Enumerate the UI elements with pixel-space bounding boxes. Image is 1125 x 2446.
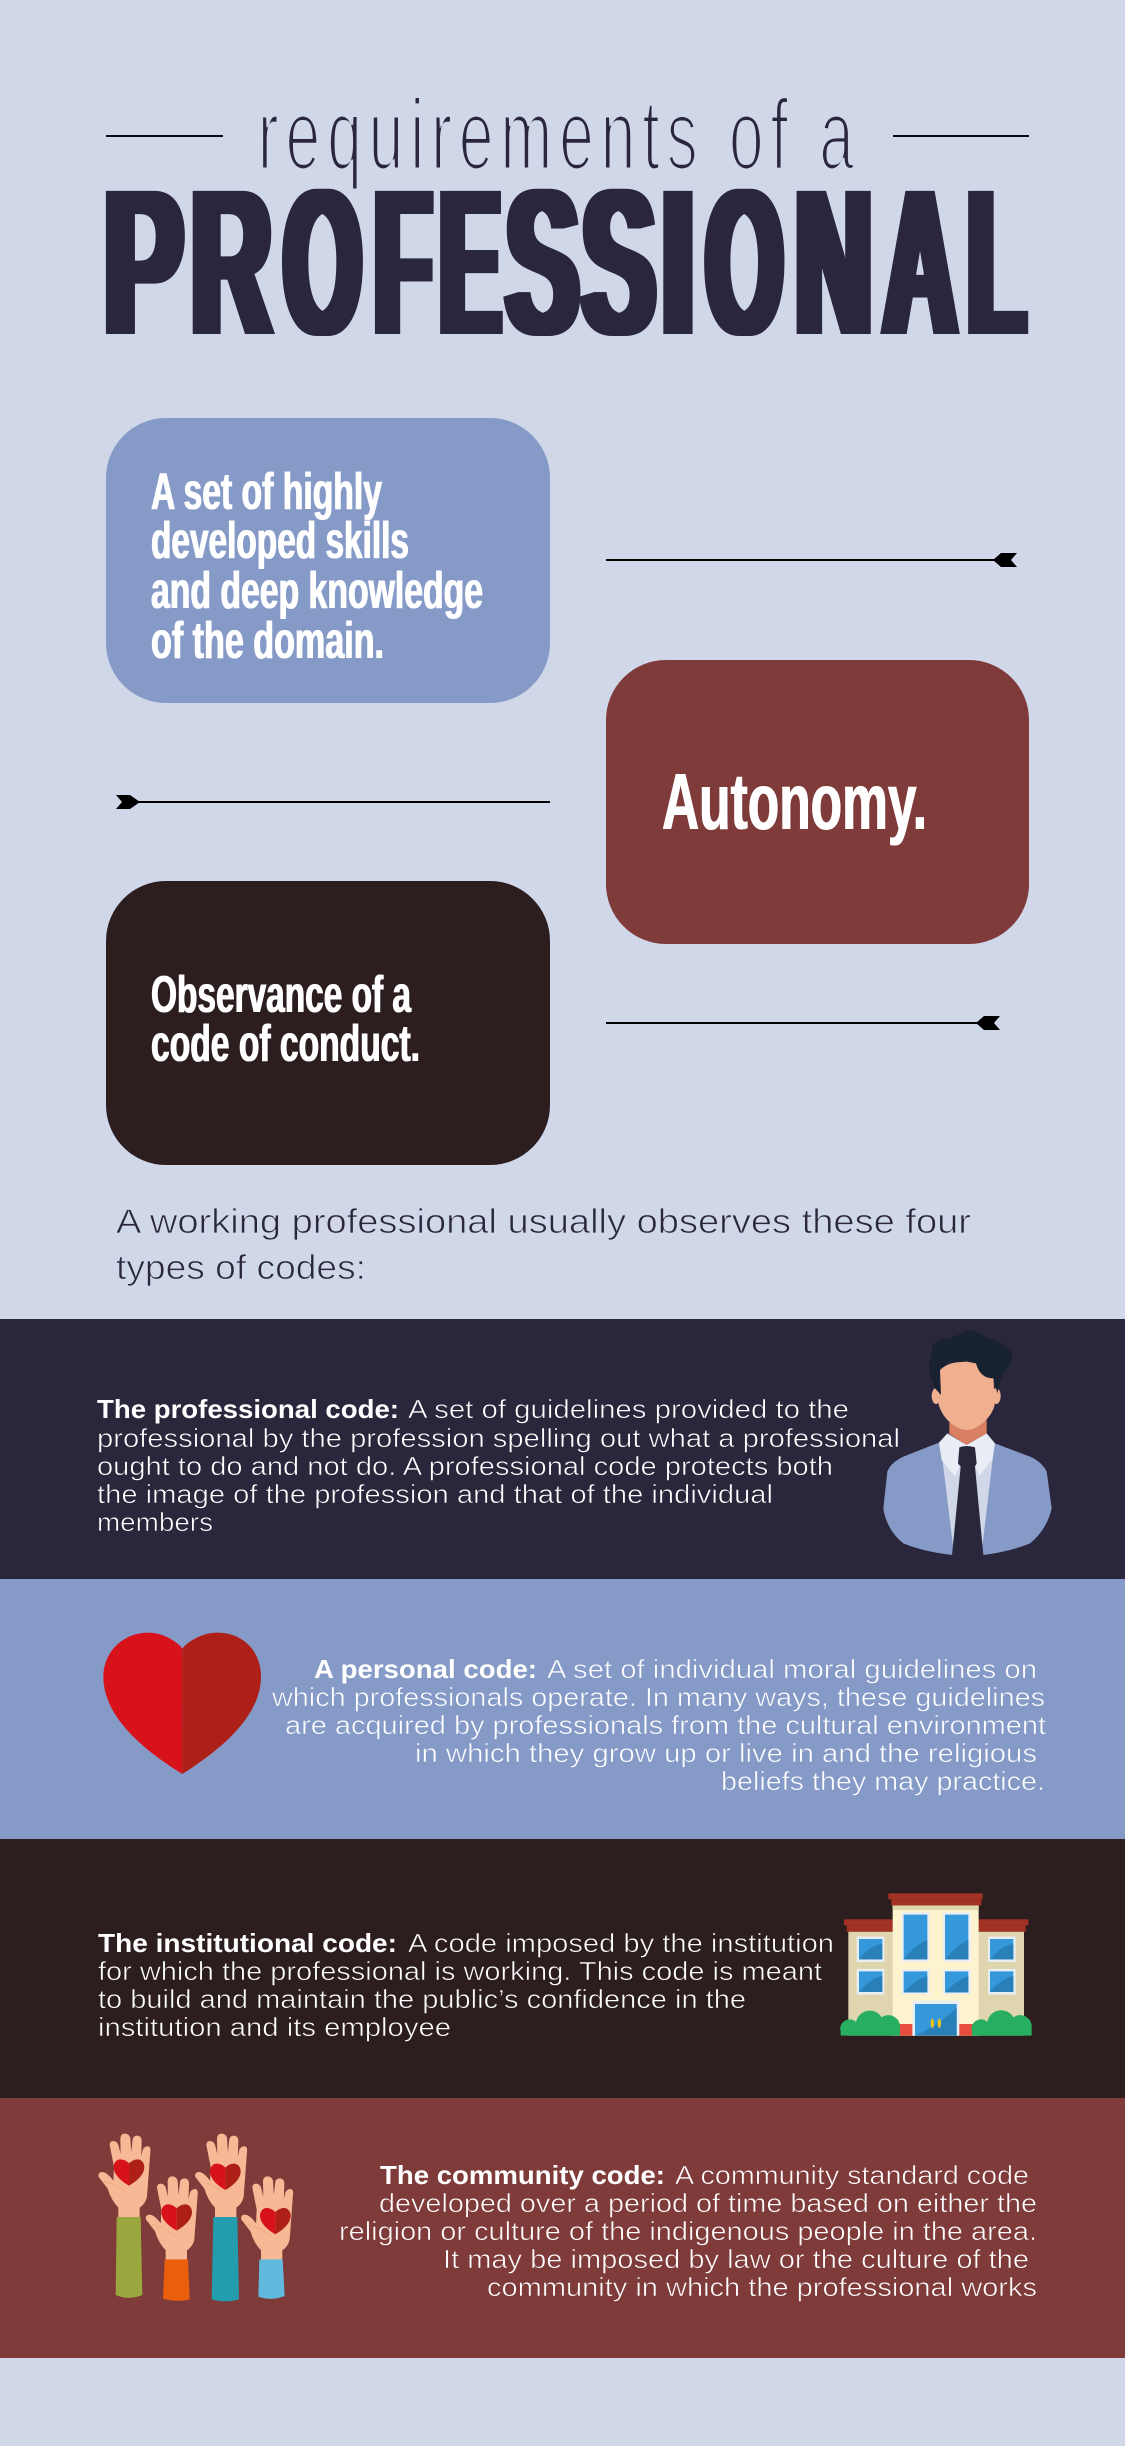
panel: professional code — [0, 1319, 1125, 1579]
text: L — [968, 147, 1025, 379]
text: community code — [339, 2160, 1037, 2302]
title line: PROFESSIONAL — [104, 147, 1025, 379]
card text: skills: and deep knowledge — [151, 562, 483, 620]
text: institutional code — [98, 1928, 834, 2042]
text: personal code: are acquired by professionals from the cultural environment — [285, 1710, 1047, 1740]
title line: PROFESSIONAL: P — [104, 147, 183, 379]
title line: PROFESSIONAL: O — [706, 147, 783, 379]
intro paragraph: types of codes: — [116, 1249, 366, 1287]
icon: businessman — [883, 1330, 1052, 1555]
panel: personal code — [0, 1579, 1125, 1839]
arrow: to conduct — [606, 1016, 1000, 1030]
title line: PROFESSIONAL: O — [284, 147, 361, 379]
text: personal code: in which they grow up or live in and the religious — [415, 1738, 1037, 1768]
intro paragraph — [116, 1203, 971, 1287]
text: community code: The community code: — [380, 2160, 665, 2190]
panel: skills card — [106, 418, 550, 703]
text: institutional code: The institutional code: — [98, 1928, 397, 1958]
title line: PROFESSIONAL: A — [884, 147, 956, 379]
title — [104, 79, 1029, 379]
text: institutional code: to build and maintain the public’s confidence in the — [98, 1984, 746, 2014]
icon: raised hands with hearts — [99, 2134, 292, 2301]
text: professional code: members — [97, 1507, 213, 1537]
arrow: to autonomy — [606, 553, 1017, 567]
text: personal code: A personal code: — [314, 1654, 537, 1684]
card text: skills: A set of highly — [151, 463, 382, 521]
text: professional code: The professional code: — [97, 1394, 399, 1424]
icon: heart — [103, 1633, 261, 1774]
text: community code: religion or culture of the indigenous people in the area. — [339, 2216, 1037, 2246]
text: community code: It may be imposed by law or the culture of the — [443, 2244, 1029, 2274]
text: community code: A community standard code — [675, 2160, 1029, 2190]
card text: skills: developed skills — [151, 512, 409, 570]
text: professional code: A set of guidelines provided to the — [408, 1394, 849, 1424]
title rule: left — [106, 135, 223, 137]
card text: autonomy: Autonomy. — [662, 757, 927, 846]
title line: PROFESSIONAL: N — [796, 147, 872, 379]
title line: PROFESSIONAL: I — [661, 147, 695, 379]
panel: autonomy card — [606, 660, 1029, 944]
text: professional code — [97, 1394, 900, 1537]
panel: community code — [0, 2098, 1125, 2358]
card text: code of conduct — [151, 966, 420, 1073]
title line: PROFESSIONAL: R — [191, 147, 271, 379]
card text: skills — [151, 463, 483, 670]
arrow: to skills — [116, 795, 550, 809]
text: professional code: the image of the profession and that of the individual — [97, 1479, 773, 1509]
panel: code of conduct card — [106, 881, 550, 1165]
title line: requirements of a: requirements of a — [258, 79, 854, 191]
text: institutional code: for which the professional is working. This code is meant — [98, 1956, 823, 1986]
text: community code: community in which the professional works — [487, 2272, 1037, 2302]
card text: skills: of the domain. — [151, 612, 384, 670]
text: professional code: ought to do and not do. A professional code protects both — [97, 1451, 833, 1481]
title line: PROFESSIONAL: F — [375, 147, 431, 379]
title line: PROFESSIONAL: E — [440, 147, 500, 379]
text: institutional code: A code imposed by the institution — [408, 1928, 834, 1958]
text: personal code — [271, 1654, 1047, 1796]
text: personal code: A set of individual moral guidelines on — [547, 1654, 1037, 1684]
card text: code of conduct: code of conduct. — [151, 1015, 420, 1073]
title line: PROFESSIONAL: S — [506, 147, 579, 379]
intro paragraph: A working professional usually observes these four — [116, 1203, 971, 1241]
card text: code of conduct: Observance of a — [151, 966, 412, 1024]
title line: PROFESSIONAL: S — [582, 147, 655, 379]
text: personal code: which professionals operate. In many ways, these guidelines — [271, 1682, 1045, 1712]
icon: building — [840, 1893, 1032, 2036]
text: personal code: beliefs they may practice. — [721, 1766, 1045, 1796]
title rule: right — [893, 135, 1029, 137]
text: community code: developed over a period of time based on either the — [379, 2188, 1037, 2218]
text: institutional code: institution and its employee — [98, 2012, 451, 2042]
text: professional code: professional by the profession spelling out what a professional — [97, 1423, 900, 1453]
panel: institutional code — [0, 1839, 1125, 2098]
